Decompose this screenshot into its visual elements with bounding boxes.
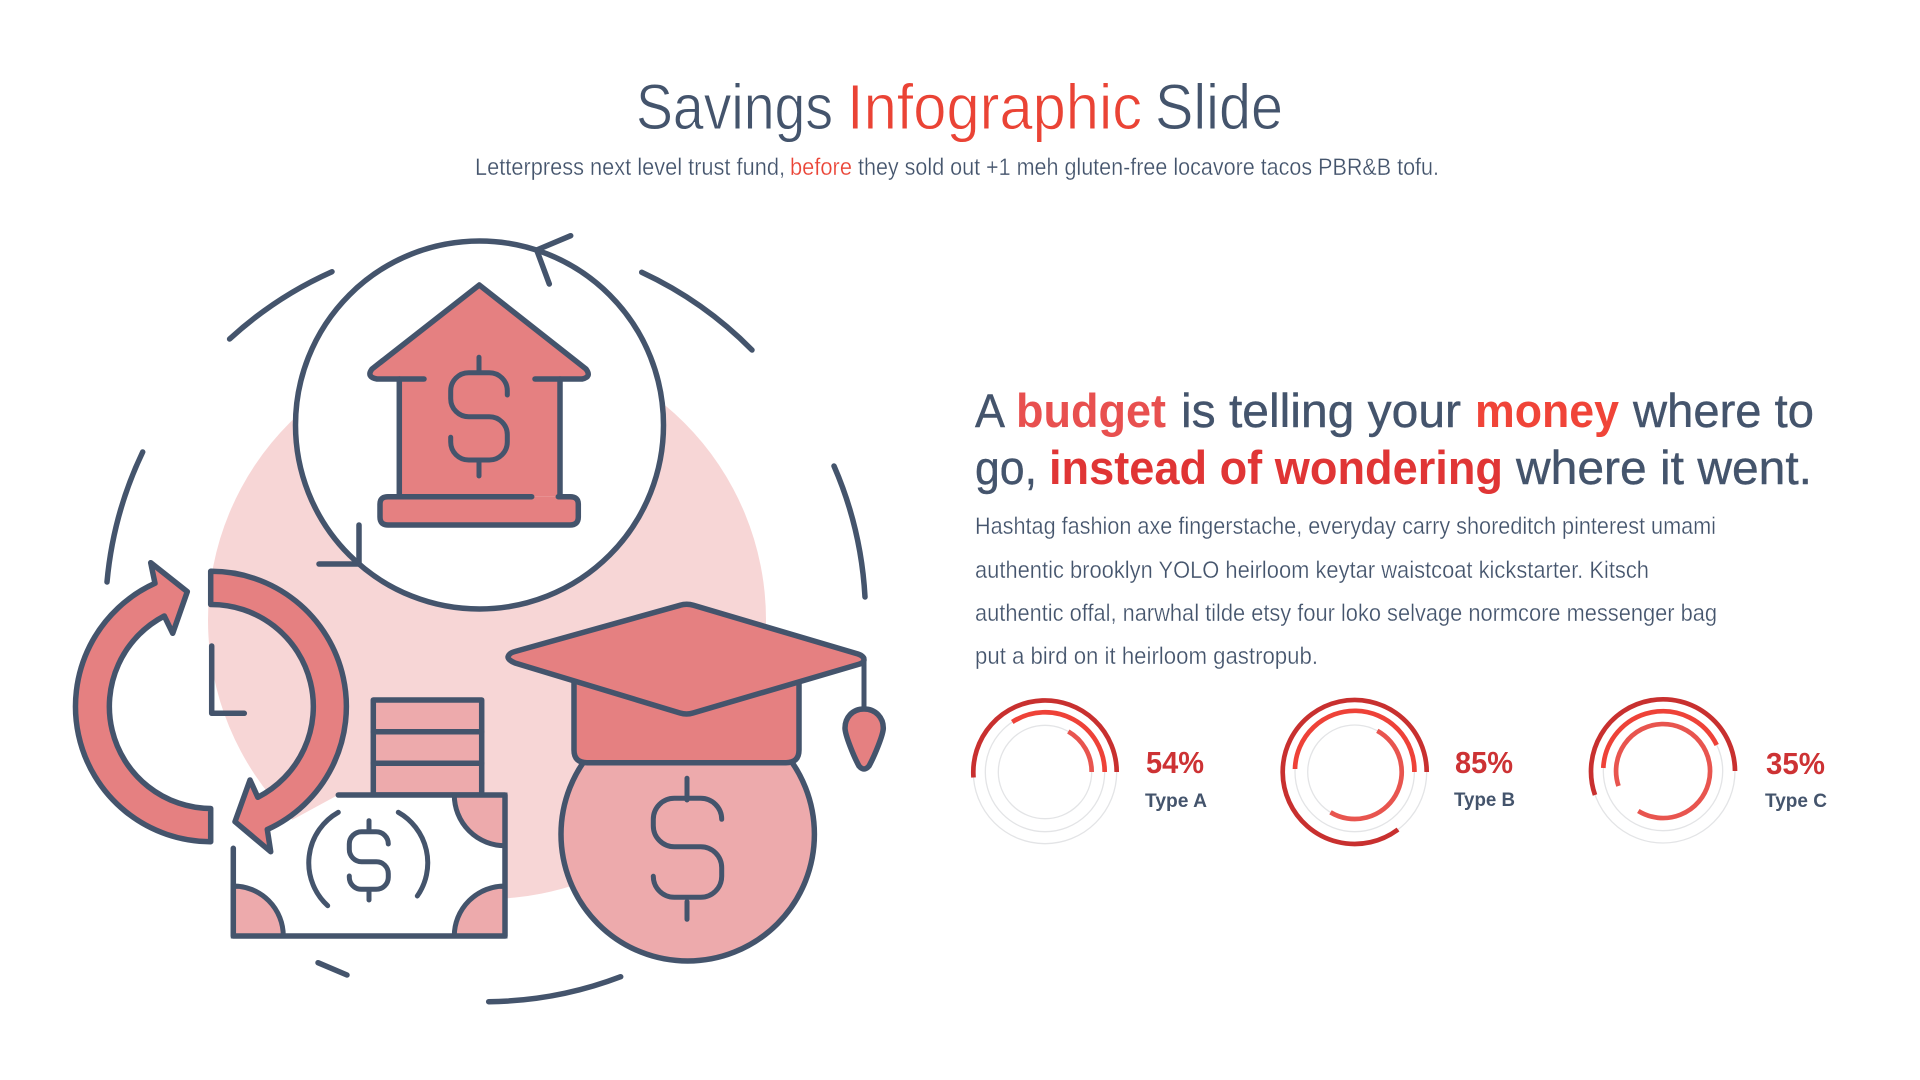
icon: graduation cap [508,604,883,769]
subtitle: before [790,154,852,181]
radial chart: Type C: 35% [1766,746,1825,781]
title: Infographic [847,71,1142,143]
subtitle [475,154,1439,181]
body paragraph: authentic offal, narwhal tilde etsy four loko selvage normcore messenger bag [975,600,1717,627]
body paragraph: authentic brooklyn YOLO heirloom keytar waistcoat kickstarter. Kitsch [975,557,1649,584]
radial chart: Type A [973,700,1207,844]
radial chart: Type A: 54% [1146,745,1204,780]
body paragraph: put a bird on it heirloom gastropub. [975,643,1318,670]
body paragraph [975,513,1717,670]
heading: budget quote [975,384,1814,494]
heading: budget quote: where to [1632,384,1814,437]
title: Slide [1155,71,1283,143]
heading: budget quote: budget [1016,384,1166,437]
radial chart: Type A: Type A [1145,791,1207,812]
illustration: savings cycle [75,236,883,1002]
heading: budget quote: go, [975,441,1037,494]
heading: budget quote: money [1475,384,1619,437]
icon: banknote [233,795,505,936]
icon: clock with circular arrows [75,563,346,852]
radial chart: Type C: Type C [1765,791,1827,812]
radial chart: Type B: 85% [1455,745,1513,780]
subtitle: they sold out +1 meh gluten-free locavore tacos PBR&B tofu. [858,154,1439,181]
radial chart: Type C [1591,699,1827,843]
icon: house with dollar in circle [296,236,664,609]
dashed outer ring [107,272,865,1002]
title [636,71,1283,143]
icon: large coin with dollar [561,708,814,961]
subtitle: Letterpress next level trust fund, [475,154,785,181]
radial chart: Type B [1283,700,1515,844]
background pink circle [208,341,766,899]
body paragraph: Hashtag fashion axe fingerstache, everyday carry shoreditch pinterest umami [975,513,1716,540]
title: Savings [636,71,833,143]
heading: budget quote: where it went. [1515,441,1812,494]
radial chart: Type B: Type B [1454,790,1515,811]
heading: budget quote: A [975,384,1006,437]
heading: budget quote: instead of wondering [1049,441,1503,494]
heading: budget quote: is telling your [1181,384,1461,437]
icon: coin stack [373,700,482,795]
